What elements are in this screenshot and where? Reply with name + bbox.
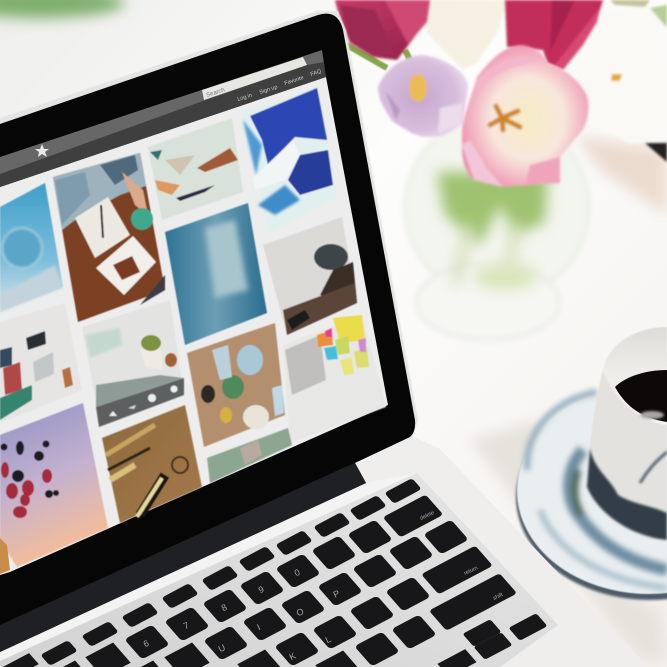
tile: plant on desk <box>82 300 184 427</box>
flower: crimson tulip top centre <box>505 0 603 70</box>
saucer streaks <box>527 392 667 588</box>
qwerty key row <box>141 520 469 667</box>
flower: lilac tulip <box>378 55 468 137</box>
search box <box>202 57 307 100</box>
nav links: Log in <box>237 93 253 103</box>
shift key row <box>315 573 517 667</box>
number key row <box>63 495 443 667</box>
flower: white peony centre <box>427 0 507 70</box>
key legends: 6 <box>142 638 150 649</box>
well rim highlight <box>0 473 417 661</box>
laptop lid bezel <box>0 14 415 652</box>
star logo <box>35 144 49 157</box>
keyboard <box>3 478 548 667</box>
laptop deck <box>0 436 648 667</box>
nav links: Favorite <box>284 75 305 87</box>
laptop screen <box>0 50 388 575</box>
icon strip <box>96 375 184 427</box>
coffee reflection <box>640 411 664 419</box>
saucer underside <box>516 394 667 600</box>
tile: purple gradient with berries <box>0 403 108 567</box>
cup body <box>587 370 667 540</box>
coffee <box>615 370 667 422</box>
nav links: FAQ <box>310 69 323 78</box>
tile: food table from above <box>187 323 285 447</box>
flowers <box>335 0 667 187</box>
tile: blurred green photo <box>207 428 292 483</box>
keyboard well <box>0 473 558 667</box>
saucer plate <box>517 388 667 594</box>
key legends: 7 <box>182 620 190 631</box>
coffee cup <box>587 327 667 540</box>
coffee saucer <box>516 388 667 600</box>
vase with stems <box>405 115 589 340</box>
laptop lid edge highlight <box>0 11 418 438</box>
tile: white office <box>0 303 82 423</box>
tile: blue mountain <box>240 88 337 233</box>
key legends: I <box>255 622 262 632</box>
tile: white room with lamp <box>263 217 357 335</box>
tile: sticky notes on wall <box>283 315 386 443</box>
cup rim <box>603 327 667 425</box>
key legends <box>142 510 504 662</box>
key legends: delete <box>419 510 435 522</box>
key legends: K <box>288 651 297 662</box>
flower: white tulip right <box>573 0 667 143</box>
nav links: Sign up <box>259 84 278 96</box>
tile: blue room <box>165 203 267 345</box>
page background <box>0 77 388 575</box>
key legends: P <box>332 588 341 600</box>
flower: big pink tulip <box>462 45 588 187</box>
tile: pencils on wood <box>102 405 202 523</box>
laptop base <box>0 436 648 667</box>
nav links <box>237 69 323 103</box>
blurred green leaf in background <box>0 0 125 18</box>
home key row <box>237 546 493 667</box>
key legends: L <box>324 634 332 645</box>
cup marbling <box>640 452 667 483</box>
key legends: U <box>217 642 227 654</box>
blurred beige shape behind flowers <box>575 135 667 215</box>
cup dark glaze band <box>587 448 667 540</box>
key legends: return <box>463 565 479 577</box>
nav bar <box>0 50 326 187</box>
key legends: 0 <box>293 567 301 578</box>
desk shadow beside the laptop <box>470 420 667 660</box>
flower: crimson tulip top left <box>335 0 430 60</box>
key legends: shift <box>492 592 504 602</box>
search label: Search <box>206 87 226 99</box>
dark object at right edge <box>645 143 667 162</box>
tile: hands and notebook on table <box>53 153 165 322</box>
tile: sky and bubble <box>0 183 63 312</box>
hinge strip <box>0 463 366 652</box>
arrow keys <box>437 613 548 667</box>
key legends: O <box>295 606 305 618</box>
tile: small dessert at corner <box>0 538 10 574</box>
key legends: 8 <box>220 602 228 613</box>
function key row <box>3 478 422 667</box>
key legends: 9 <box>257 584 265 595</box>
stems <box>345 44 410 68</box>
tile: painted table setting <box>148 118 243 220</box>
